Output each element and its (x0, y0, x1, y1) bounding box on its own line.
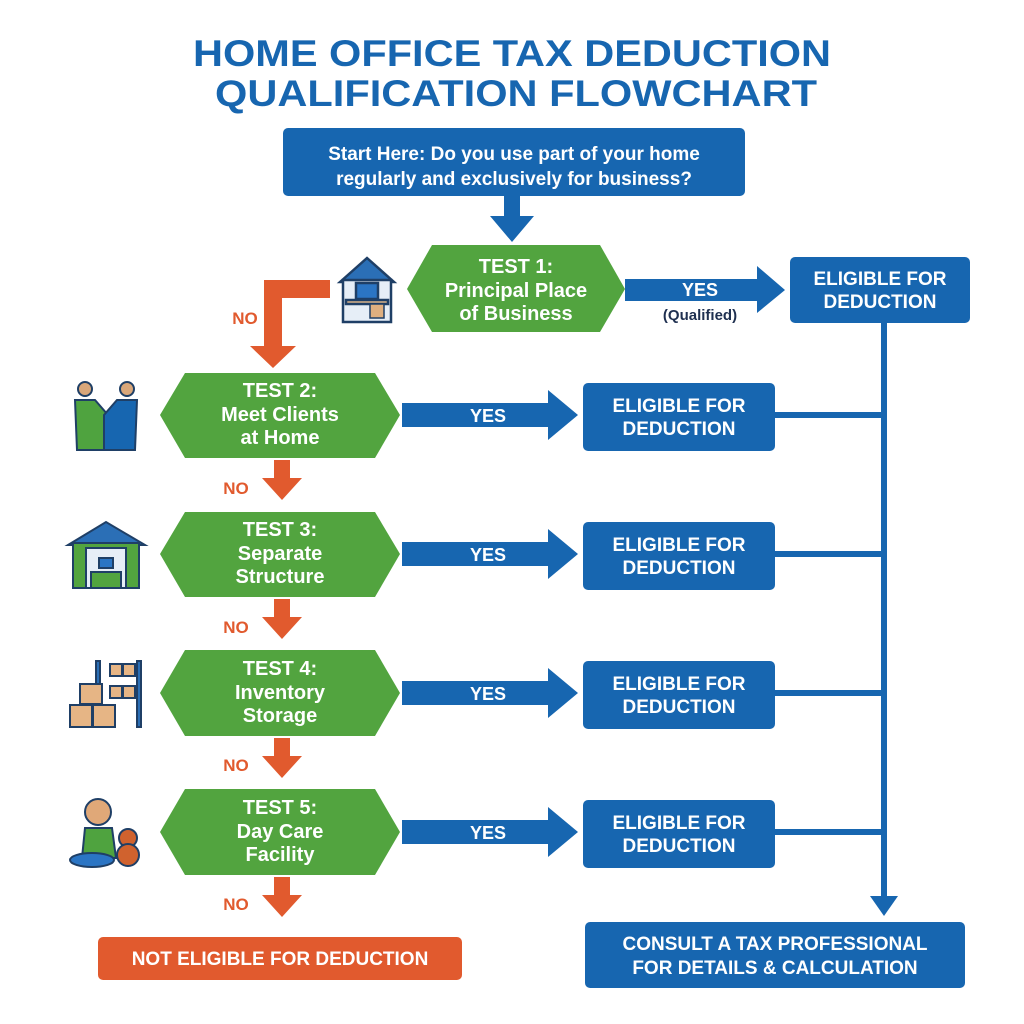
eligible box top (790, 257, 970, 323)
icon: handshake (75, 382, 137, 450)
arrow: test 1 yes (625, 266, 785, 324)
test 2 row: TEST 2: (243, 380, 317, 402)
test 5 row: Facility (246, 844, 315, 866)
icon: inventory shelves (70, 661, 141, 727)
test 5 row: ELIGIBLE FOR (612, 813, 746, 834)
test 5 row (160, 789, 775, 875)
test 2 row: at Home (241, 427, 319, 449)
test 4 row: DEDUCTION (623, 697, 735, 718)
arrow: test 1 yes: YES (682, 280, 718, 300)
arrow: start to test 1 (490, 196, 534, 242)
test 3 row: ELIGIBLE FOR (612, 535, 746, 556)
no arrow 5: NO (223, 895, 249, 914)
test 5 row: TEST 5: (243, 797, 317, 819)
test 1 hexagon (407, 245, 625, 332)
not eligible box (98, 937, 462, 980)
test 5 row: YES (470, 823, 506, 843)
no arrow 5 (223, 877, 302, 917)
consult box: CONSULT A TAX PROFESSIONAL (622, 934, 928, 955)
test 2 row: Meet Clients (221, 404, 339, 426)
test 3 row (160, 512, 775, 597)
test 4 row: TEST 4: (243, 658, 317, 680)
test 2 row: DEDUCTION (623, 419, 735, 440)
start box: Start Here: Do you use part of your home (328, 144, 700, 165)
test 5 row: Day Care (237, 821, 323, 843)
test 1 hexagon: of Business (459, 303, 573, 325)
test 2 row (160, 373, 775, 458)
test 3 row: DEDUCTION (623, 558, 735, 579)
title: HOME OFFICE TAX DEDUCTION (193, 33, 831, 74)
icon: house (340, 258, 394, 322)
eligible box top: ELIGIBLE FOR (814, 269, 947, 290)
start box: regularly and exclusively for business? (336, 169, 692, 190)
start box (283, 128, 745, 196)
icon: garage (68, 522, 145, 588)
test 3 row: Structure (236, 566, 324, 588)
title: QUALIFICATION FLOWCHART (215, 73, 817, 114)
not eligible box: NOT ELIGIBLE FOR DEDUCTION (132, 949, 428, 970)
arrow: test 1 yes: (Qualified) (663, 307, 737, 324)
test 1 hexagon: TEST 1: (479, 256, 553, 278)
test 3 row: Separate (238, 543, 322, 565)
title (193, 33, 831, 114)
icon: child with teddy bear (70, 799, 139, 867)
test 3 row: YES (470, 545, 506, 565)
test 2 row: YES (470, 406, 506, 426)
no arrow 2: NO (223, 479, 249, 498)
consult box: FOR DETAILS & CALCULATION (632, 958, 918, 979)
test 4 row (160, 650, 775, 736)
eligible box top: DEDUCTION (824, 292, 936, 313)
test 4 row: ELIGIBLE FOR (612, 674, 746, 695)
no arrow 4 (223, 738, 302, 778)
test 4 row: Inventory (235, 682, 326, 704)
test 2 row: ELIGIBLE FOR (612, 396, 746, 417)
no arrow 3 (223, 599, 302, 639)
test 5 row: DEDUCTION (623, 836, 735, 857)
test 1 hexagon: Principal Place (445, 280, 587, 302)
no arrow 2 (223, 460, 302, 500)
test 4 row: Storage (243, 705, 317, 727)
arrow: test 1 no (232, 280, 330, 368)
consult box (585, 922, 965, 988)
right connector line with arrow to consult (775, 322, 898, 916)
test 4 row: YES (470, 684, 506, 704)
no arrow 4: NO (223, 756, 249, 775)
test 3 row: TEST 3: (243, 519, 317, 541)
no arrow 3: NO (223, 618, 249, 637)
arrow: test 1 no: NO (232, 309, 258, 328)
